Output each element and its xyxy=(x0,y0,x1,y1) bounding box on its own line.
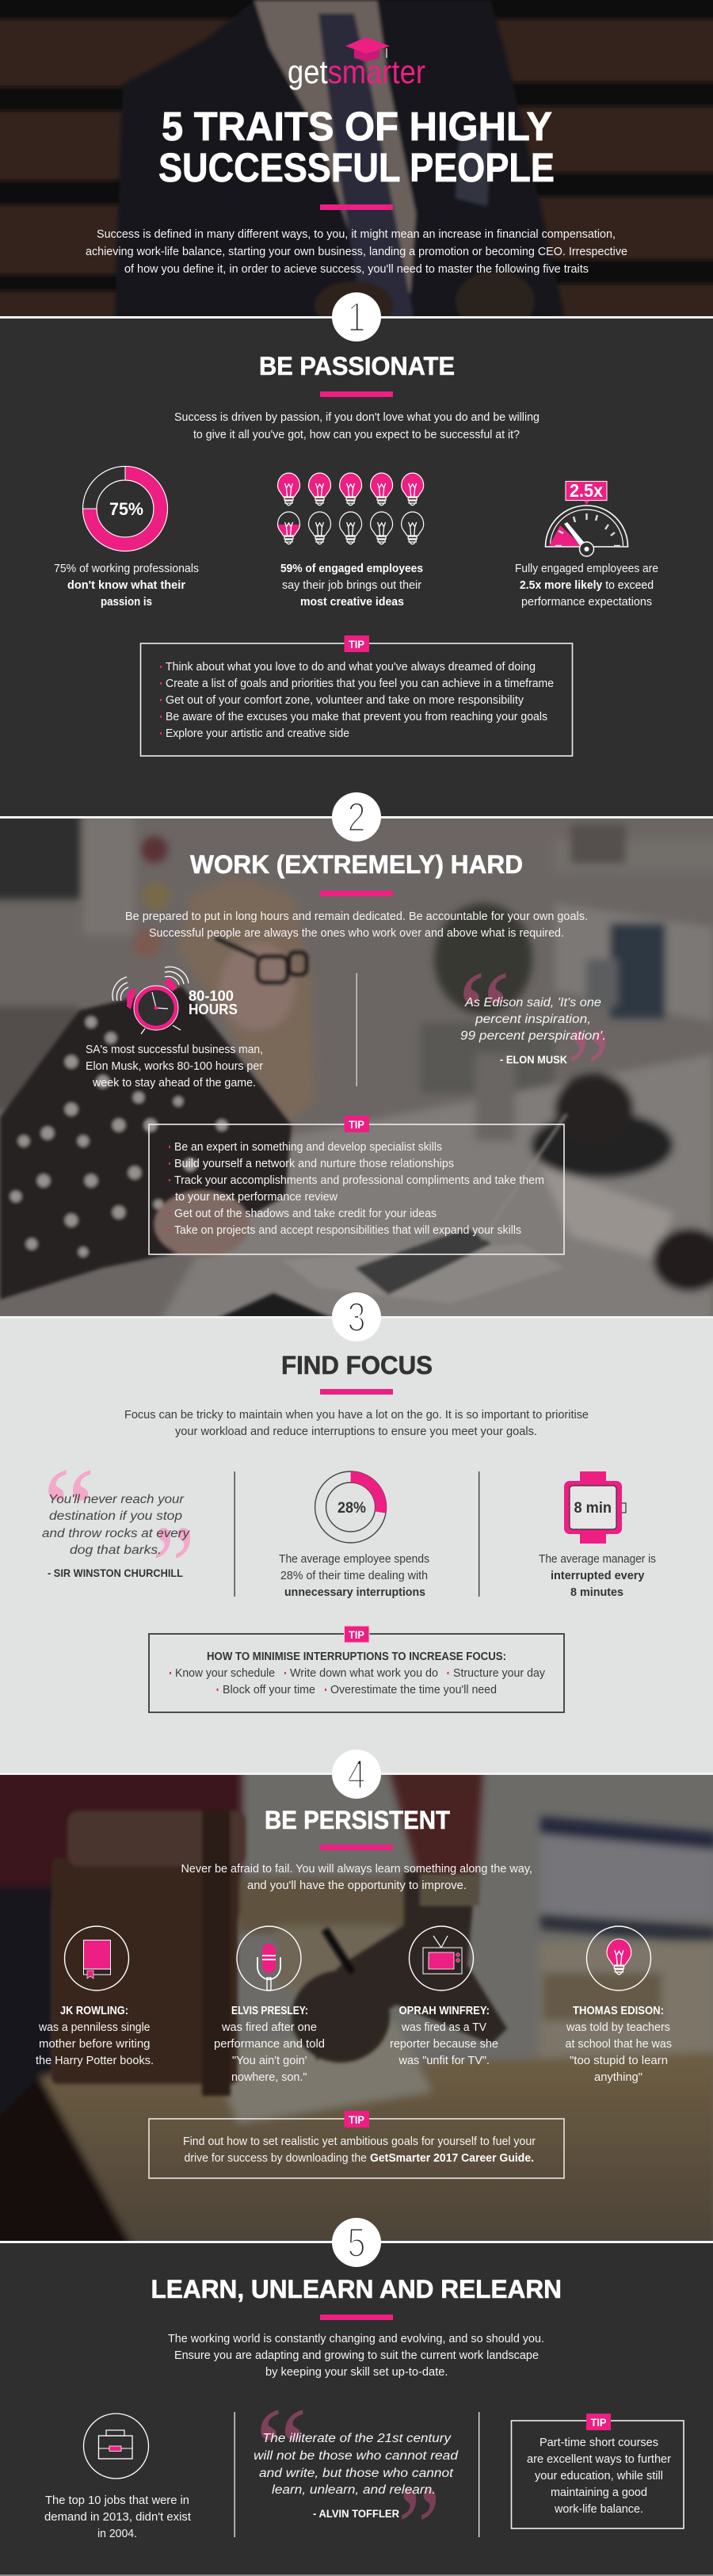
caption: 2.5x: 2.5x more likely to exceed xyxy=(520,579,654,592)
tip tag: TIP xyxy=(349,639,364,651)
panel: 2 work extremely hard xyxy=(0,812,713,1323)
caption: elvis presley: was fired after one xyxy=(221,2021,317,2034)
section intro: to give it all you've got, how can you expect to be successful at it? xyxy=(193,429,520,441)
stat: 80-100 hours: HOURS xyxy=(189,1002,238,1017)
tip bullets: Create a list of goals and priorities that you feel you can achieve in a timeframe xyxy=(166,677,554,690)
tip bullets: Be aware of the excuses you make that prevent you from reaching your goals xyxy=(166,711,547,723)
divider xyxy=(234,2412,235,2537)
caption: thomas edison: at school that he was xyxy=(566,2038,672,2051)
caption: top 10 jobs: in 2004. xyxy=(97,2528,137,2540)
tip tag xyxy=(344,635,369,652)
number badge 1 xyxy=(332,292,381,342)
heading underline xyxy=(320,2315,393,2320)
quote: churchill xyxy=(42,1444,195,1633)
intro text: achieving work-life balance, starting your own business, landing a promotion or becoming CEO. Irrespective xyxy=(86,246,627,258)
heading underline xyxy=(320,891,393,896)
header photo: man in suit against wood wall xyxy=(0,0,713,331)
number badge 5 xyxy=(332,2218,381,2267)
quote: edison: ” xyxy=(567,1005,610,1136)
quote: alvin toffler xyxy=(254,2383,459,2576)
tip tag xyxy=(344,2111,369,2128)
caption: thomas edison: was told by teachers xyxy=(566,2021,670,2034)
tip tag: TIP xyxy=(349,1119,364,1131)
icon: alarm clock xyxy=(112,967,189,1034)
caption: 75%: 75% of working professionals xyxy=(54,563,199,575)
panel: 1 be passionate xyxy=(54,357,658,757)
tip tag: TIP xyxy=(349,1629,364,1641)
section intro xyxy=(124,1409,589,1438)
heading underline xyxy=(320,391,393,397)
panel: 5 learn unlearn relearn xyxy=(0,2243,713,2576)
tip text: drive for success by downloading the xyxy=(184,2152,367,2165)
caption: elon musk hours: Elon Musk, works 80-100 hours per xyxy=(86,1060,263,1073)
title underline xyxy=(320,204,393,210)
number badge 3: 3 xyxy=(347,1295,366,1341)
donut chart: 28%: 28% xyxy=(337,1500,366,1517)
divider xyxy=(356,973,357,1086)
quote: churchill: dog that barks. xyxy=(70,1544,162,1557)
quote: alvin toffler: “ xyxy=(255,2383,308,2515)
logo: getsmarter xyxy=(288,37,425,90)
section background xyxy=(0,1319,713,1773)
tip heading: HOW TO MINIMISE INTERRUPTIONS TO INCREASE FOCUS: xyxy=(207,1651,506,1663)
caption: 2.5x: performance expectations xyxy=(521,596,652,609)
caption: elvis presley: "You ain't goin' xyxy=(232,2055,307,2067)
section intro: and you'll have the opportunity to improve. xyxy=(247,1880,467,1892)
heading: find focus: FIND FOCUS xyxy=(281,1351,433,1380)
tip bullets xyxy=(160,661,554,740)
tip bullets: Think about what you love to do and what you've always dreamed of doing xyxy=(166,661,536,674)
number badge 2: 2 xyxy=(347,795,366,841)
caption: elvis presley: nowhere, son." xyxy=(231,2071,307,2084)
tip box 1 xyxy=(141,635,572,756)
caption: thomas edison: "too stupid to learn xyxy=(570,2055,668,2067)
heading: be persistent: BE PERSISTENT xyxy=(265,1806,450,1834)
panel: 3 find focus xyxy=(0,1319,713,1773)
heading: learn unlearn relearn: LEARN, UNLEARN AND RELEARN xyxy=(151,2275,562,2303)
caption: elvis presley: performance and told xyxy=(214,2038,325,2051)
caption: oprah winfrey: was fired as a TV xyxy=(401,2021,486,2034)
tip bullets: Track your accomplishments and professional compliments and take them xyxy=(174,1174,544,1187)
tip bullets: Structure your day xyxy=(453,1667,546,1680)
tip text: maintaining a good xyxy=(551,2486,647,2499)
caption: top 10 jobs xyxy=(44,2494,191,2540)
tip text xyxy=(527,2437,671,2516)
quote: churchill: “ xyxy=(43,1444,96,1575)
caption: elon musk hours xyxy=(86,1044,263,1090)
tip bullets xyxy=(170,1667,546,1696)
quote: edison: “ xyxy=(458,947,511,1078)
caption: jk rowling: mother before writing xyxy=(39,2038,151,2051)
quote: edison: As Edison said, 'It's one xyxy=(464,996,601,1009)
icon: gauge 2.5x xyxy=(545,480,627,556)
tip bullets: Block off your time xyxy=(223,1684,315,1696)
bottom edge xyxy=(0,2574,713,2576)
quote: churchill: ” xyxy=(152,1502,195,1633)
caption: 8 min: 8 minutes xyxy=(570,1586,623,1599)
tip box 2 xyxy=(149,1116,564,1254)
quote: alvin toffler: - ALVIN TOFFLER xyxy=(313,2508,399,2520)
icon: gauge 2.5x: 2.5x xyxy=(570,480,603,501)
tip bullets xyxy=(169,1141,544,1237)
number badge 4: 4 xyxy=(347,1752,366,1798)
number badge 3 xyxy=(332,1292,381,1341)
section intro: Never be afraid to fail. You will always learn something along the way, xyxy=(181,1863,532,1876)
tip text: Find out how to set realistic yet ambitious goals for yourself to fuel your xyxy=(183,2135,536,2148)
tip bullets: Take on projects and accept responsibilities that will expand your skills xyxy=(174,1224,521,1237)
caption: 8 min: The average manager is xyxy=(539,1553,656,1566)
caption: oprah winfrey: OPRAH WINFREY: xyxy=(399,2005,490,2017)
quote: alvin toffler: and write, but those who cannot xyxy=(259,2467,454,2480)
number badge 1: 1 xyxy=(347,295,366,341)
number badge 4 xyxy=(332,1750,381,1799)
caption: 59%: most creative ideas xyxy=(300,596,404,609)
caption: elon musk hours: SA's most successful business man, xyxy=(86,1044,263,1056)
quote: churchill: destination if you stop xyxy=(49,1509,182,1523)
quote: edison: percent inspiration, xyxy=(475,1013,591,1026)
caption: oprah winfrey xyxy=(390,2005,498,2067)
caption: 8 min: interrupted every xyxy=(551,1570,645,1582)
caption: 28%: The average employee spends xyxy=(279,1553,429,1566)
quote: alvin toffler: will not be those who cannot read xyxy=(254,2449,459,2463)
tip tag: TIP xyxy=(591,2417,607,2429)
tip bullets: Be an expert in something and develop specialist skills xyxy=(174,1141,442,1154)
section intro: Focus can be tricky to maintain when you have a lot on the go. It is so important to prioritise xyxy=(124,1409,589,1422)
section intro: Successful people are always the ones who work over and above what is required. xyxy=(149,927,564,940)
section intro: The working world is constantly changing and evolving, and so should you. xyxy=(168,2333,544,2345)
tip text: work-life balance. xyxy=(554,2503,643,2516)
section divider lines xyxy=(0,316,713,2243)
caption: 8 min xyxy=(539,1553,656,1599)
quote: edison: - ELON MUSK xyxy=(500,1054,567,1066)
intro text: Success is defined in many different ways, to you, it might mean an increase in financial compensation, xyxy=(97,228,616,241)
quote: churchill: and throw rocks at every xyxy=(42,1527,190,1540)
caption: elon musk hours: week to stay ahead of the game. xyxy=(92,1077,256,1090)
icon: watch 8 min xyxy=(564,1471,626,1544)
heading: be passionate: BE PASSIONATE xyxy=(259,352,455,380)
tip text: your education, while still xyxy=(535,2470,663,2483)
panel: 4 be persistent xyxy=(0,1767,713,2250)
logo wordmark: getsmarter xyxy=(288,53,425,90)
section intro xyxy=(174,411,540,441)
section intro: Success is driven by passion, if you don't love what you do and be willing xyxy=(174,411,540,424)
caption: 28%: 28% of their time dealing with xyxy=(280,1570,428,1582)
tip tag xyxy=(586,2414,611,2430)
tip bullets: Explore your artistic and creative side xyxy=(166,727,349,740)
caption: 59%: 59% of engaged employees xyxy=(280,563,423,575)
photo: hand writing beside leather case xyxy=(0,1767,713,2250)
icon: microphone xyxy=(237,1926,301,1990)
caption: thomas edison: anything" xyxy=(594,2071,642,2084)
heading underline xyxy=(320,1845,393,1850)
caption: jk rowling: JK ROWLING: xyxy=(60,2005,128,2017)
tip bullets: Overestimate the time you'll need xyxy=(330,1684,497,1696)
tip tag xyxy=(344,1116,369,1132)
caption: 59% xyxy=(280,563,423,609)
quote: edison: 99 percent perspiration'. xyxy=(460,1029,606,1043)
caption: 75%: passion is xyxy=(101,596,152,609)
divider xyxy=(234,1471,235,1597)
section background xyxy=(0,319,713,816)
icon: graduation cap xyxy=(345,37,390,62)
number badge 2 xyxy=(332,792,381,841)
tip bullets: Get out of the shadows and take credit for your ideas xyxy=(174,1208,437,1220)
icon: lightbulb xyxy=(586,1926,651,1990)
intro text: of how you define it, in order to acieve success, you'll need to master the following five traits xyxy=(124,263,589,276)
section intro xyxy=(125,910,588,940)
tip text: GetSmarter 2017 Career Guide. xyxy=(370,2152,534,2165)
intro text xyxy=(86,228,627,276)
heading underline xyxy=(320,1389,393,1395)
caption: jk rowling: the Harry Potter books. xyxy=(36,2055,154,2067)
icon: television xyxy=(409,1926,474,1990)
stat: 80-100 hours xyxy=(189,988,238,1017)
tip box 5 xyxy=(512,2414,684,2528)
section intro: Ensure you are adapting and growing to suit the current work landscape xyxy=(174,2349,539,2362)
section intro: Be prepared to put in long hours and remain dedicated. Be accountable for your own goals. xyxy=(125,910,588,923)
number badge 5: 5 xyxy=(347,2220,366,2266)
icon: briefcase xyxy=(84,2414,149,2479)
caption: 28%: unnecessary interruptions xyxy=(284,1586,425,1599)
title: 5 TRAITS OF HIGHLY xyxy=(162,104,552,149)
caption: thomas edison xyxy=(566,2005,672,2084)
title xyxy=(158,104,555,190)
tip bullets: Build yourself a network and nurture those relationships xyxy=(174,1158,454,1170)
caption: 59%: say their job brings out their xyxy=(282,579,421,592)
tip bullets: Write down what work you do xyxy=(290,1667,438,1680)
quote: churchill: You'll never reach your xyxy=(48,1493,185,1506)
caption: elvis presley xyxy=(214,2005,325,2084)
stat: 80-100 hours: 80-100 xyxy=(189,988,234,1004)
tip box 3 xyxy=(149,1626,564,1712)
panel: header hero xyxy=(0,0,713,331)
title: SUCCESSFUL PEOPLE xyxy=(158,145,555,190)
section intro xyxy=(168,2333,544,2379)
caption: thomas edison: THOMAS EDISON: xyxy=(573,2005,664,2017)
tip bullets: to your next performance review xyxy=(175,1191,338,1204)
photo: woman at desk xyxy=(0,812,713,1323)
caption: top 10 jobs: demand in 2013, didn't exist xyxy=(44,2511,191,2524)
caption: elvis presley: ELVIS PRESLEY: xyxy=(231,2005,308,2017)
tip tag: TIP xyxy=(349,2114,364,2126)
section background xyxy=(0,2243,713,2574)
heading: work extremely hard: WORK (EXTREMELY) HARD xyxy=(190,850,523,879)
quote: churchill: - SIR WINSTON CHURCHILL xyxy=(48,1567,183,1579)
tip text: are excellent ways to further xyxy=(527,2453,671,2466)
section intro xyxy=(181,1863,532,1892)
icon: lightbulbs 59% xyxy=(277,473,424,544)
caption: oprah winfrey: was "unfit for TV". xyxy=(398,2055,490,2067)
quote: edison xyxy=(458,947,610,1136)
caption: jk rowling: was a penniless single xyxy=(38,2021,151,2034)
quote: alvin toffler: learn, unlearn, and relearn. xyxy=(272,2483,436,2497)
caption: 75% xyxy=(54,563,199,609)
tip bullets: Know your schedule xyxy=(175,1667,275,1680)
tip text xyxy=(183,2135,536,2165)
section intro: your workload and reduce interruptions to ensure you meet your goals. xyxy=(175,1425,537,1438)
tip tag xyxy=(344,1626,369,1643)
caption: jk rowling xyxy=(36,2005,154,2067)
donut chart: 28% xyxy=(315,1471,387,1543)
tip text: Part-time short courses xyxy=(540,2437,658,2449)
donut chart: 75% xyxy=(82,466,168,551)
caption: oprah winfrey: reporter because she xyxy=(390,2038,498,2051)
icon: watch 8 min: 8 min xyxy=(574,1500,612,1517)
icon: book xyxy=(65,1926,128,1990)
quote: alvin toffler: The illiterate of the 21st century xyxy=(262,2432,452,2445)
tip bullets: Get out of your comfort zone, volunteer and take on more responsibility xyxy=(166,694,524,707)
section intro: by keeping your skill set up-to-date. xyxy=(265,2366,448,2379)
caption: 2.5x: Fully engaged employees are xyxy=(515,563,658,575)
tip box 4 xyxy=(149,2111,564,2178)
caption: top 10 jobs: The top 10 jobs that were in xyxy=(45,2494,189,2507)
caption: 2.5x xyxy=(515,563,658,609)
caption: 28% xyxy=(279,1553,429,1599)
caption: 75%: don't know what their xyxy=(67,579,185,592)
donut chart: 75%: 75% xyxy=(109,499,143,519)
